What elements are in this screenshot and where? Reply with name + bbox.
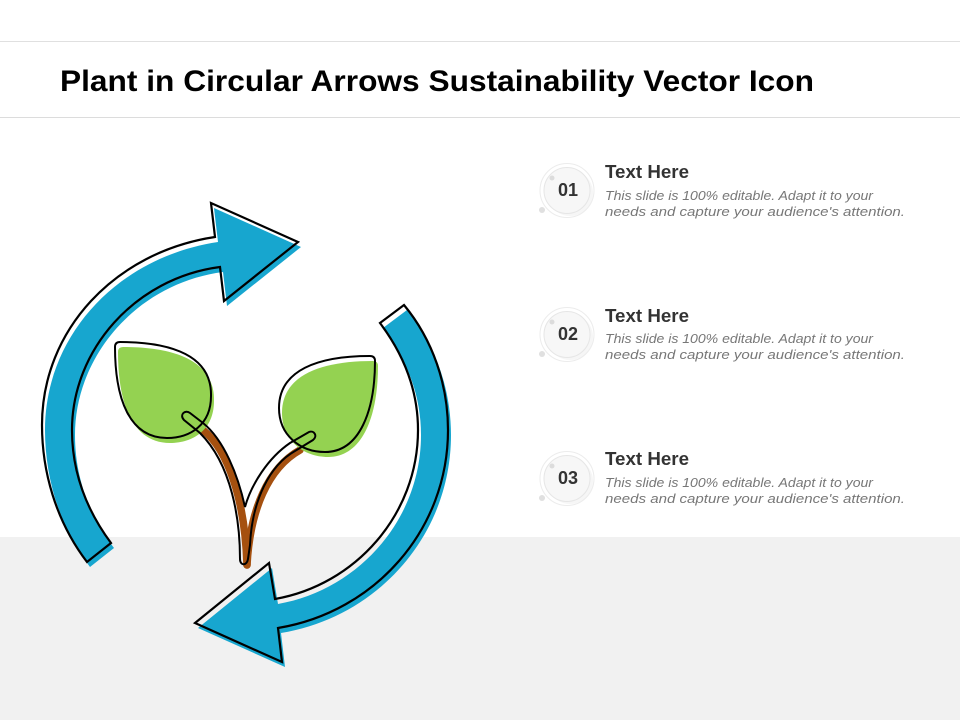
badge 03 [539, 452, 594, 506]
list item 03 [539, 449, 905, 506]
arrow: lower right clockwise [195, 305, 451, 667]
badge 01 [539, 164, 594, 218]
heading 01: Text Here [605, 162, 689, 182]
body text 03 [605, 475, 905, 506]
badge 01: 01 [558, 180, 578, 200]
body text 03: needs and capture your audience's attention. [605, 491, 905, 506]
icon: plant in circular arrows [42, 203, 451, 667]
plant stem [203, 430, 300, 565]
badge 02: 02 [558, 324, 578, 344]
title: Plant in Circular Arrows Sustainability Vector Icon [60, 65, 814, 98]
body text 01 [605, 188, 905, 219]
list item 02 [539, 306, 905, 362]
background floor band [0, 537, 960, 720]
badge 02 [539, 308, 594, 362]
list item 01 [539, 162, 905, 219]
badge 03: 03 [558, 468, 578, 488]
body text 02: This slide is 100% editable. Adapt it to your [605, 331, 874, 346]
heading 03: Text Here [605, 449, 689, 469]
stem outline [182, 412, 315, 564]
heading 02: Text Here [605, 306, 689, 326]
body text 03: This slide is 100% editable. Adapt it to your [605, 475, 874, 490]
body text 02 [605, 331, 905, 362]
body text 01: needs and capture your audience's attention. [605, 204, 905, 219]
body text 01: This slide is 100% editable. Adapt it to your [605, 188, 874, 203]
right leaf [279, 356, 378, 457]
body text 02: needs and capture your audience's attention. [605, 347, 905, 362]
arrow: upper left clockwise [42, 203, 301, 567]
left leaf [115, 342, 214, 443]
